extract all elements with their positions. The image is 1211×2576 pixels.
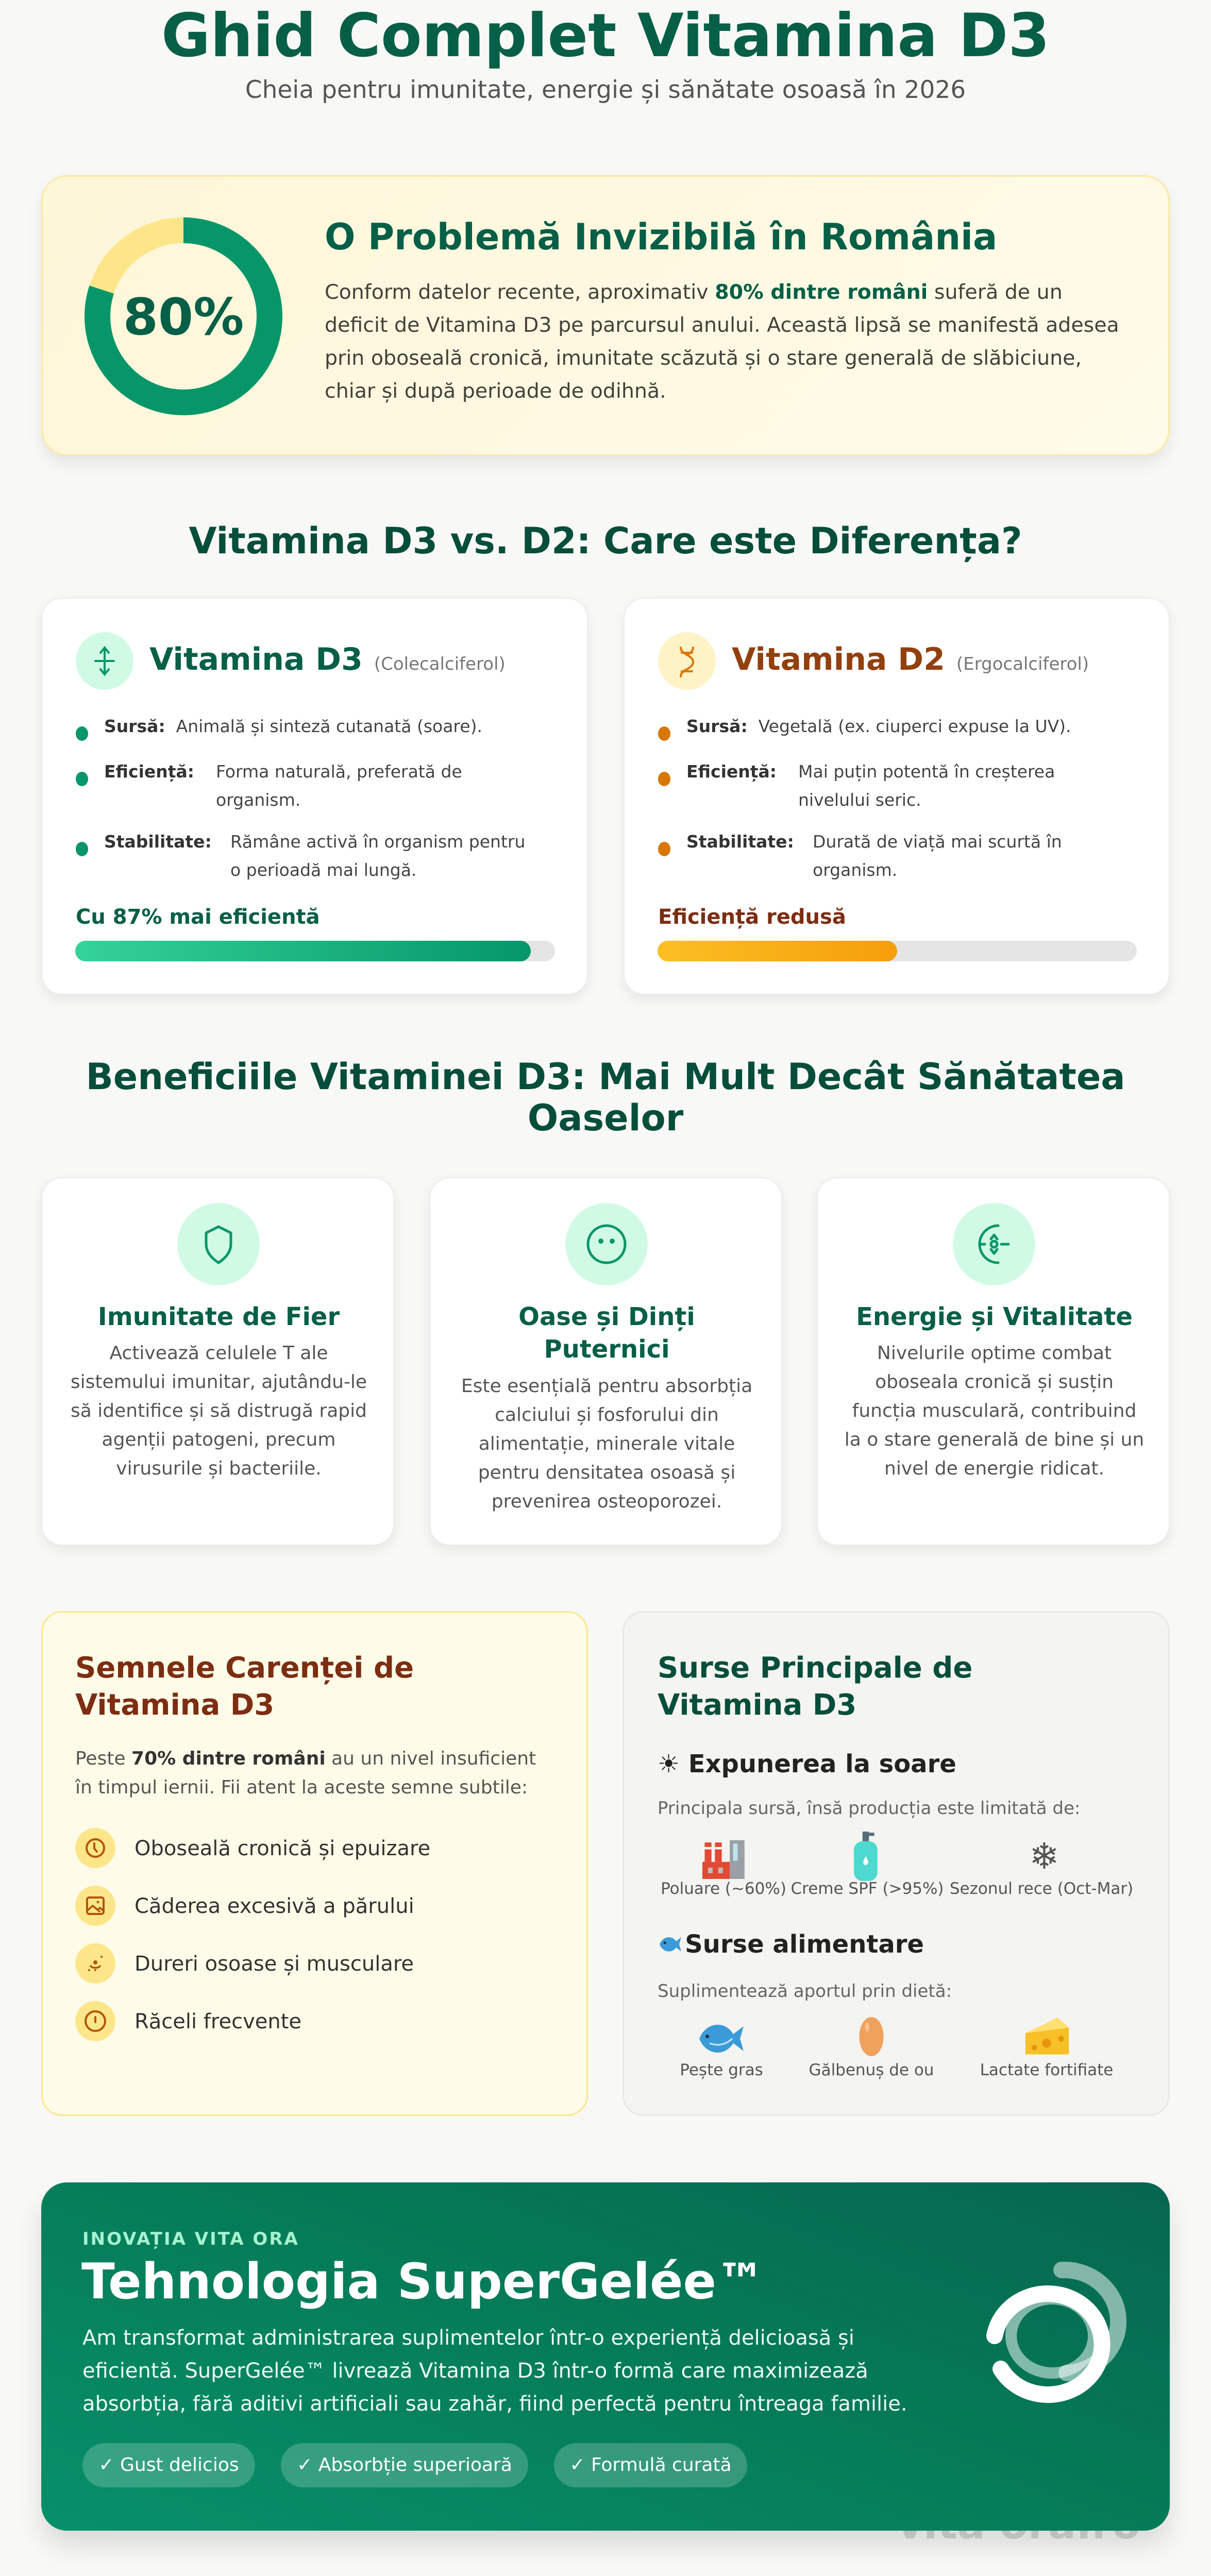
benefit text: alimentație, minerale vitale: [479, 1433, 735, 1454]
eyebrow: INOVAȚIA VITA ORA: [82, 2229, 299, 2249]
benefit text: prevenirea osteoporozei.: [492, 1491, 722, 1512]
icon: face: [565, 1203, 648, 1285]
D2 bullets: nivelului seric.: [798, 790, 921, 810]
panel: sources: Creme SPF (>95%): [790, 1879, 944, 1898]
panel: sources: Sezonul rece (Oct-Mar): [950, 1879, 1133, 1898]
benefit title: Imunitate de Fier: [98, 1302, 340, 1331]
benefit text: pentru densitatea osoasă și: [478, 1462, 735, 1483]
icon: factory: [702, 1836, 746, 1879]
benefit text: calciului și fosforului din: [495, 1404, 719, 1426]
sign: pain: Dureri osoase și musculare: [134, 1952, 414, 1976]
panel: sources: Gălbenuș de ou: [809, 2061, 934, 2079]
panel: benefit bones: [429, 1177, 782, 1546]
promo text: eficientă. SuperGelée™ livrează Vitamina D3 într-o formă care maximizează: [82, 2359, 868, 2383]
D3 bullets: [76, 716, 525, 880]
icon: energy: [953, 1203, 1035, 1285]
panel: sources: [623, 1611, 1170, 2116]
D3 bullets: Eficiență:: [104, 761, 194, 782]
benefit text: să identifice și să distrugă rapid: [71, 1400, 367, 1421]
benefit text: agenții patogeni, precum: [102, 1429, 335, 1450]
benefit text: sistemului imunitar, ajutându-le: [71, 1371, 367, 1393]
panel: SuperGelée: [41, 2182, 1170, 2531]
sign: hair: Căderea excesivă a părului: [134, 1894, 414, 1918]
D2 bullets: [658, 716, 1071, 880]
icon: sunscreen: [853, 1832, 880, 1881]
D3 bullets: Rămâne activă în organism pentru: [230, 832, 525, 852]
D2 bullets: Eficiență:: [686, 761, 777, 782]
benefit text: Nivelurile optime combat: [877, 1343, 1112, 1364]
signs heading: Vitamina D3: [75, 1688, 274, 1722]
sign: colds: [62, 2001, 526, 2042]
benefit text: [461, 1376, 752, 1512]
promo text: Am transformat administrarea suplimentelor într-o experiență delicioasă și: [82, 2326, 854, 2350]
food icons: [624, 2014, 1171, 2071]
pills: [82, 2443, 255, 2487]
hero text: prin oboseală cronică, imunitate scăzută și o stare generală de slăbiciune,: [325, 346, 1082, 370]
title: Ghid Complet Vitamina D3: [161, 1, 1050, 71]
panel: Vitamina D3: [41, 598, 588, 995]
sources heading: [658, 1650, 1121, 1724]
hero text: [325, 280, 1119, 403]
promo title: Tehnologia SuperGelée™: [81, 2253, 765, 2310]
D3 bullets: Sursă: Animală și sinteză cutanată (soare).: [104, 716, 482, 736]
D2 bullets: Durată de viață mai scurtă în: [813, 832, 1062, 852]
hero text: Conform datelor recente, aproximativ 80% dintre români suferă de un: [325, 280, 1063, 304]
signs heading: Semnele Carenței de: [75, 1651, 414, 1685]
icon: D2: [658, 632, 716, 690]
panel: benefit immunity: [41, 1177, 394, 1546]
donut chart 80%: [85, 217, 282, 415]
panel: deficiency signs: [41, 1611, 588, 2116]
benefit text: [845, 1343, 1144, 1479]
watermark: vita ora.ro: [897, 2500, 1140, 2548]
pills: ✓ Gust delicios: [98, 2454, 239, 2476]
D2 bullets: Mai puțin potentă în creșterea: [798, 761, 1055, 782]
icon: D3: [76, 632, 133, 690]
benefit text: virusurile și bacteriile.: [116, 1458, 322, 1479]
icon: cheese: [1024, 2016, 1070, 2058]
benefit text: funcția musculară, contribuind: [852, 1400, 1136, 1421]
signs intro: în timpul iernii. Fii atent la aceste semne subtile:: [75, 1777, 528, 1798]
icon: shield: [177, 1203, 260, 1285]
food subheading: Surse alimentare: [685, 1930, 924, 1959]
icon: fish: [698, 2022, 745, 2056]
sign: fatigue: Oboseală cronică și epuizare: [134, 1837, 430, 1860]
D3 efficiency label: Cu 87% mai eficientă: [76, 905, 320, 929]
benefit title: Puternici: [544, 1335, 670, 1364]
benefit title: Oase și Dinți: [518, 1302, 695, 1331]
subtitle: Cheia pentru imunitate, energie și sănătate osoasă în 2026: [245, 76, 966, 104]
panel: SuperGelée: ✓ Absorbție superioară: [297, 2454, 512, 2476]
promo text: [82, 2321, 907, 2420]
D3 bullets: organism.: [216, 790, 300, 810]
heading: benefits: Beneficiile Vitaminei D3: Mai Mult Decât Sănătatea Oaselor: [86, 1056, 1125, 1139]
benefit text: nivel de energie ridicat.: [884, 1458, 1104, 1479]
D2 efficiency label: Eficiență redusă: [658, 905, 846, 929]
sign: pain: [75, 1943, 414, 1984]
sources heading: Vitamina D3: [658, 1688, 856, 1722]
signs intro: Peste 70% dintre români au un nivel insuficient: [75, 1748, 536, 1769]
hero text: chiar și după perioade de odihnă.: [325, 379, 666, 403]
D3 title: Vitamina D3 (Colecalciferol): [149, 641, 506, 677]
sources heading: Surse Principale de: [658, 1651, 972, 1685]
sign: colds: Răceli frecvente: [134, 2010, 301, 2033]
icon: snowflake: ❄: [1029, 1835, 1059, 1877]
signs heading: [75, 1651, 414, 1722]
benefit text: oboseala cronică și susțin: [875, 1371, 1114, 1393]
factor labels: Poluare (~60%): [661, 1879, 786, 1898]
benefit text: Activează celulele T ale: [110, 1343, 328, 1364]
sign: hair: [75, 1886, 414, 1926]
signs list: [75, 1828, 430, 2041]
icon: egg: [857, 2014, 885, 2057]
logo: [958, 2260, 1134, 2414]
D2 bullets: Stabilitate:: [686, 832, 794, 852]
signs intro: [75, 1748, 536, 1798]
sign: fatigue: [75, 1828, 430, 1868]
food labels: Pește gras: [680, 2061, 763, 2079]
hero text: deficit de Vitamina D3 pe parcursul anului. Această lipsă se manifestă adesea: [325, 313, 1119, 337]
panel: sources: Lactate fortifiate: [980, 2061, 1113, 2079]
benefit title: Energie și Vitalitate: [856, 1302, 1133, 1331]
D2 efficiency bar: [658, 941, 1137, 961]
limiting factors icons: [624, 1832, 1171, 1883]
benefit text: Este esențială pentru absorbția: [461, 1376, 752, 1397]
D3 bullets: Stabilitate:: [104, 832, 212, 852]
food text: Suplimentează aportul prin dietă:: [658, 1981, 952, 2002]
panel: hero problem: [41, 175, 1170, 456]
panel: SuperGelée: ✓ Formulă curată: [569, 2454, 732, 2476]
benefit title: [518, 1302, 695, 1364]
D3 bullets: Forma naturală, preferată de: [216, 761, 462, 782]
D2 title: Vitamina D2 (Ergocalciferol): [732, 641, 1089, 677]
food subheading: [658, 1928, 924, 1967]
panel: benefit energy: [817, 1177, 1170, 1546]
sun text: Principala sursă, însă producția este limitată de:: [658, 1798, 1080, 1819]
D3 bullets: o perioadă mai lungă.: [230, 860, 416, 880]
hero heading: O Problemă Invizibilă în România: [325, 216, 997, 258]
donut chart 80%: 80%: [123, 288, 244, 347]
promo text: absorbția, fără aditivi artificiali sau zahăr, fiind perfectă pentru întreaga familie.: [82, 2392, 907, 2416]
D2 bullets: organism.: [813, 860, 897, 880]
D2 bullets: Sursă: Vegetală (ex. ciuperci expuse la UV).: [686, 716, 1071, 736]
sun subheading: ☀ Expunerea la soare: [658, 1750, 956, 1778]
panel: Vitamina D2: [624, 598, 1170, 995]
heading: D3 vs D2: Vitamina D3 vs. D2: Care este Diferența?: [189, 520, 1022, 562]
benefit text: [71, 1343, 367, 1479]
D3 efficiency bar: [75, 941, 555, 961]
benefit text: la o stare generală de bine și un: [845, 1429, 1144, 1450]
